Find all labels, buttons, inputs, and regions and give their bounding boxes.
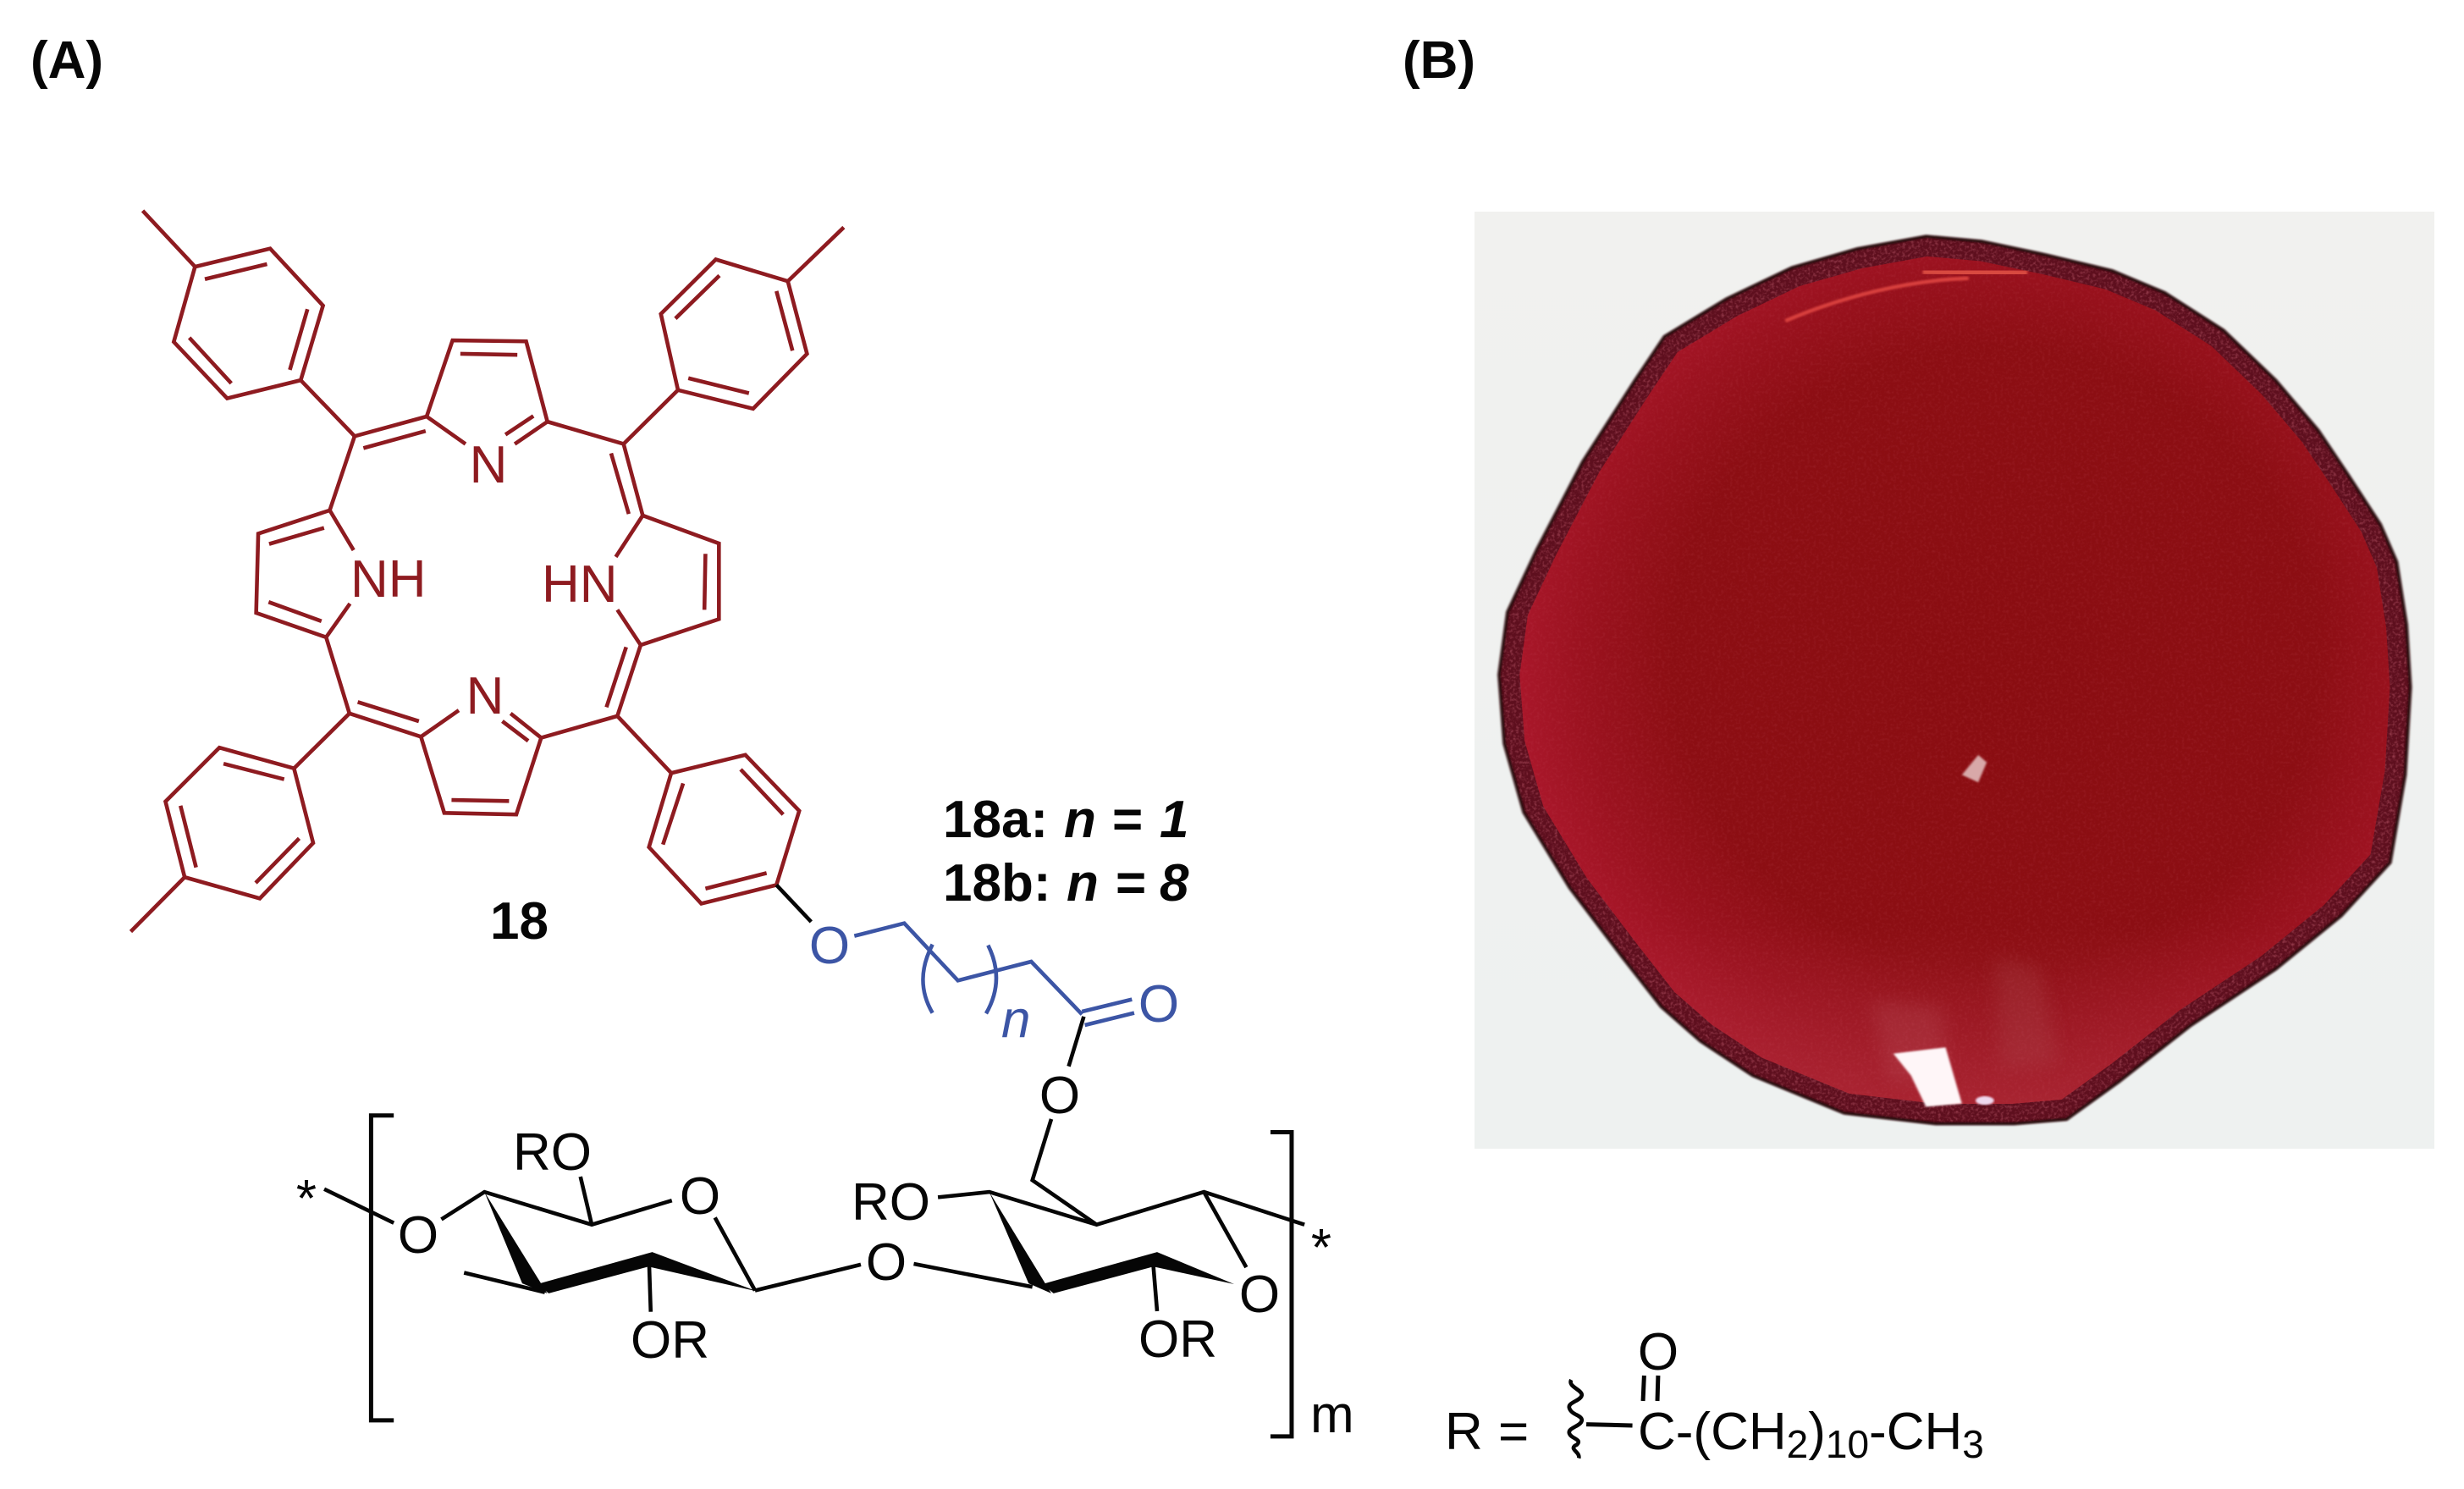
panel B: photo of red film — [1475, 212, 2434, 1149]
18b: n — [1067, 854, 1099, 913]
18b: = — [1116, 854, 1146, 913]
top glare — [1785, 278, 1969, 321]
inner film — [1519, 256, 2390, 1104]
porphyrin core and tolyl rings — [130, 211, 844, 932]
18a: 18a: — [943, 791, 1048, 849]
ring O 1: O — [680, 1167, 720, 1226]
sugar ring bonds and brackets — [324, 1017, 1304, 1437]
RO 2: RO — [852, 1173, 930, 1232]
ring O 2: O — [1239, 1266, 1280, 1324]
acyl chain formula: 3 — [1962, 1422, 1984, 1466]
acyl chain formula: ) — [1808, 1403, 1826, 1461]
panel A: chemical structure — [130, 211, 1354, 1444]
18b: 18b: — [943, 854, 1050, 913]
cellulose repeat unit — [296, 1017, 1354, 1444]
RO 1: RO — [513, 1123, 592, 1182]
acyl chain formula: 10 — [1826, 1422, 1869, 1466]
N bottom: N — [466, 667, 504, 725]
repeat n: n — [1001, 990, 1030, 1049]
panel label B: (B) — [1403, 31, 1475, 90]
R equals: = — [1498, 1403, 1529, 1461]
R group definition — [1445, 1323, 1984, 1466]
acyl chain formula: -CH — [1869, 1403, 1962, 1461]
porphyrin bonds — [130, 211, 844, 932]
ester O: O — [1039, 1067, 1080, 1125]
acyl chain formula: 2 — [1787, 1422, 1808, 1466]
specular highlight — [1893, 1047, 1962, 1107]
R equals: R — [1445, 1403, 1483, 1461]
18b: 8 — [1160, 854, 1189, 913]
OR 2: OR — [1138, 1310, 1217, 1369]
panel label A: (A) — [30, 31, 103, 90]
blue alkyl ester linker — [809, 917, 1179, 1049]
variants label 18a and 18b — [943, 791, 1189, 913]
linker oxygen: O — [809, 917, 850, 975]
N top: N — [470, 436, 507, 494]
linker bonds — [854, 924, 1134, 1025]
compound number 18: 18 — [490, 892, 548, 951]
wavy attachment and bonds — [1569, 1376, 1658, 1459]
speck — [1962, 755, 1987, 782]
rim — [1478, 223, 2433, 1138]
repeat m: m — [1310, 1386, 1354, 1444]
18a: 1 — [1160, 791, 1188, 849]
OR 1: OR — [631, 1311, 709, 1370]
film disc — [1478, 223, 2433, 1138]
acyl chain formula: C-(CH — [1638, 1403, 1787, 1461]
18a: = — [1112, 791, 1143, 849]
rim outer edge — [1499, 236, 2411, 1123]
carbonyl oxygen: O — [1138, 975, 1179, 1034]
star left: * — [296, 1170, 317, 1228]
small reflection — [1976, 1096, 1994, 1105]
photo background — [1475, 212, 2434, 1149]
glycosidic O: O — [866, 1233, 907, 1292]
carbonyl O: O — [1638, 1323, 1678, 1381]
O 1: O — [398, 1206, 438, 1265]
HN: HN — [542, 555, 618, 614]
18a: n — [1064, 791, 1096, 849]
star right: * — [1311, 1219, 1331, 1277]
NH: NH — [350, 550, 427, 609]
